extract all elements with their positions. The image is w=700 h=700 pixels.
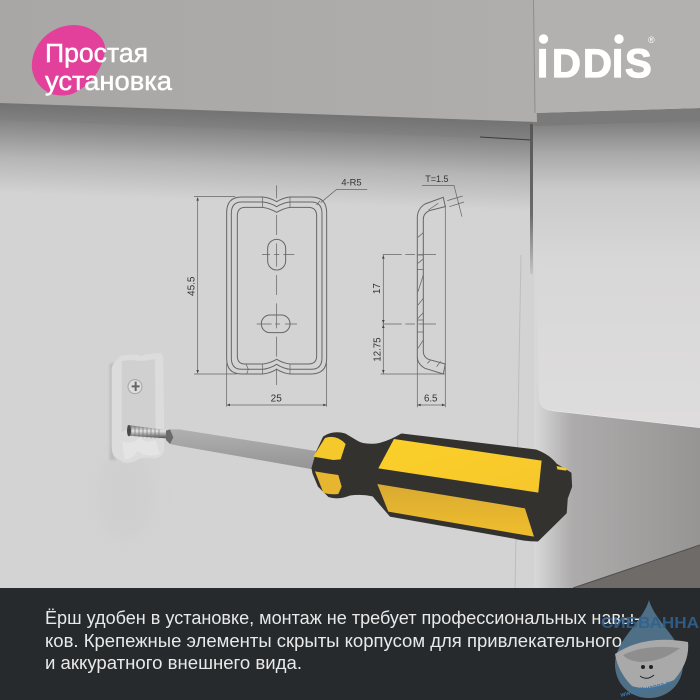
dimension arrows: [382, 255, 445, 406]
ceiling panel: [0, 0, 700, 122]
screwdriver tip: [166, 429, 173, 444]
handle body: [313, 433, 571, 540]
watermark: [601, 600, 699, 699]
horizontal slot: [261, 315, 290, 333]
wall background: [0, 100, 700, 590]
watermark url: www.sibvanna.ru: [619, 679, 673, 699]
cabinet side panel: [530, 108, 700, 428]
dimension label 6.5: 6.5: [424, 393, 437, 404]
inner bracket outline: [237, 207, 317, 364]
brand logo: IDDIS: [537, 42, 652, 86]
handle collar yellow upper: [313, 437, 346, 460]
dimension label 4-R5: 4-R5: [341, 178, 362, 188]
dimension label 17: 17: [372, 283, 383, 294]
technical drawing: side view of the bracket: [372, 174, 464, 407]
handle collar yellow lower: [315, 471, 342, 494]
title line 1: Простая: [45, 40, 148, 68]
handle yellow panel upper: [378, 439, 542, 493]
caption line 3: и аккуратного внешнего вида.: [45, 653, 302, 673]
dimension label T=1.5: T=1.5: [425, 174, 449, 184]
handle end yellow accent: [557, 466, 567, 471]
notch and centre lines: [246, 185, 320, 385]
dimension label 25: 25: [271, 393, 282, 404]
screwdriver shaft: [170, 429, 320, 470]
bracket lower highlight: [122, 437, 160, 459]
watermark name: СИБВАННА: [601, 615, 699, 632]
dimension label 45.5: 45.5: [187, 276, 198, 296]
bracket inner face: [122, 359, 156, 432]
caption line 1: Ёрш удобен в установке, монтаж не требует профессиональных навы-: [45, 608, 640, 628]
dimension lines: [194, 189, 367, 407]
handle yellow panel lower: [377, 484, 534, 537]
dimension label 12.75: 12.75: [372, 337, 383, 362]
title line 2: установка: [45, 68, 173, 96]
bracket side shadow: [110, 363, 116, 460]
middle bracket outline: [231, 202, 322, 369]
vertical slot: [268, 239, 286, 270]
outer bracket outline: [227, 197, 327, 374]
water drop: [615, 600, 683, 698]
bathtub mascot: [615, 640, 688, 688]
screwdriver: [166, 429, 571, 540]
technical drawing: front view of the bracket: [187, 178, 367, 407]
registered mark: ®: [648, 35, 655, 45]
bracket section profile: [417, 197, 445, 374]
caption line 2: ков. Крепежные элементы скрыты корпусом для привлекательного: [45, 631, 622, 651]
caption text: [45, 608, 640, 673]
bracket shadow on wall: [97, 450, 153, 540]
bracket body: [112, 353, 164, 463]
title: [45, 40, 173, 96]
section hatching: [417, 203, 441, 367]
cabinet underside and floor: [536, 380, 700, 590]
caption bar: [0, 588, 700, 700]
pink badge: [32, 25, 105, 96]
right edge and centre lines: [381, 185, 464, 407]
lower screw thread: [127, 425, 167, 438]
upper screw head: [128, 380, 142, 394]
dimension arrows: [196, 197, 327, 406]
mounted bracket with screws: [110, 353, 167, 463]
